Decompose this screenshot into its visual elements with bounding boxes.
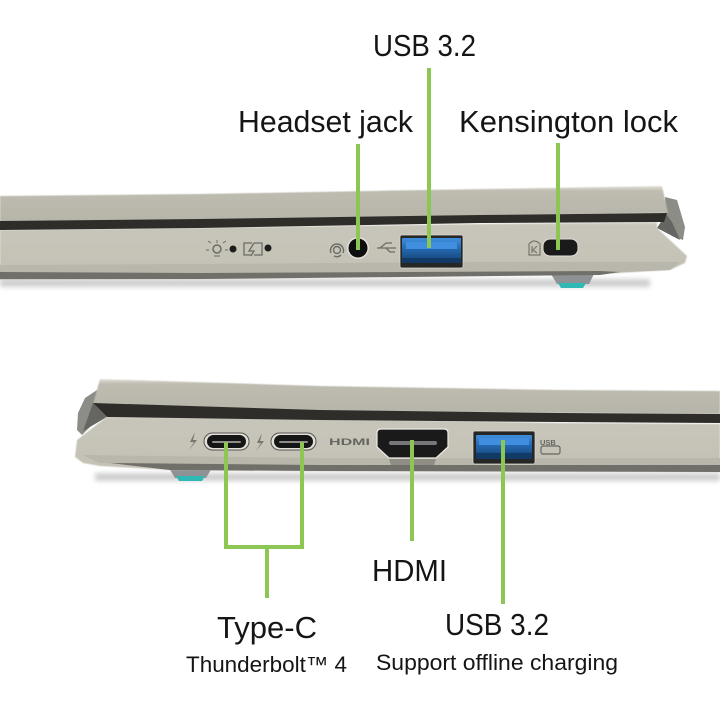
laptop side view: bottom bbox=[75, 379, 720, 481]
usb port bbox=[473, 431, 535, 464]
headset icon bbox=[330, 244, 343, 257]
shadow bbox=[0, 279, 650, 287]
body bbox=[0, 222, 687, 280]
label: USB 3.2 bottom: USB 3.2 bbox=[445, 607, 549, 642]
usb charge icon: USB bbox=[540, 438, 556, 447]
foot bbox=[551, 274, 594, 288]
usb charge icon bbox=[540, 438, 560, 454]
headset jack bbox=[347, 237, 369, 259]
hinge gap bbox=[657, 214, 680, 240]
label: Type-C: Type-C bbox=[217, 610, 317, 645]
hinge gap bbox=[83, 403, 107, 431]
kensington icon bbox=[529, 241, 540, 255]
dark base band bbox=[0, 271, 620, 279]
label: USB 3.2 top: USB 3.2 bbox=[373, 28, 476, 63]
dark stripe bbox=[0, 213, 667, 230]
hdmi logo: HDMI bbox=[329, 437, 370, 447]
hinge bbox=[77, 390, 97, 435]
label: Thunderbolt 4: Thunderbolt™ 4 bbox=[186, 652, 347, 677]
thunderbolt icon 1 bbox=[189, 432, 197, 450]
dark base band bbox=[110, 463, 720, 472]
kensington slot bbox=[543, 239, 578, 256]
label: Headset jack: Headset jack bbox=[238, 104, 413, 139]
type-c port 1 bbox=[204, 433, 249, 450]
dark stripe bbox=[93, 403, 720, 423]
shadow bbox=[95, 473, 720, 481]
label: Kensington lock: Kensington lock bbox=[459, 104, 678, 139]
body lower band bbox=[82, 455, 720, 465]
label: Support offline charging: Support offline charging bbox=[376, 650, 618, 675]
status icons bbox=[206, 240, 272, 256]
hdmi port bbox=[377, 429, 448, 465]
label: HDMI: HDMI bbox=[372, 553, 447, 588]
body lower band bbox=[0, 262, 680, 273]
body bbox=[75, 416, 720, 472]
thunderbolt icon 2 bbox=[256, 433, 264, 451]
callout lines: top bbox=[356, 68, 560, 250]
usb icon bbox=[377, 243, 396, 252]
lid bbox=[0, 186, 668, 222]
foot bbox=[169, 468, 212, 481]
callout lines: bottom bbox=[224, 440, 505, 604]
lid bbox=[93, 379, 720, 414]
type-c port 2 bbox=[271, 433, 316, 450]
hinge bbox=[665, 197, 685, 240]
usb port bbox=[400, 235, 463, 268]
laptop side view: top bbox=[0, 186, 687, 288]
